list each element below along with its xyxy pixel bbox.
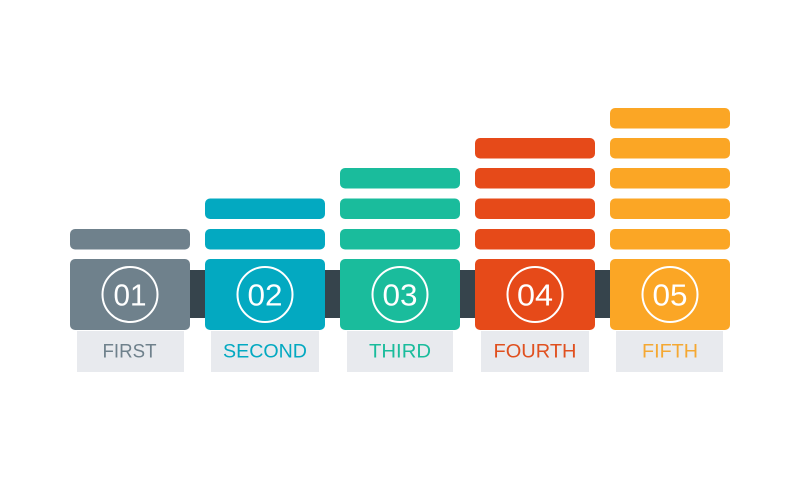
number box 05: 05 bbox=[652, 278, 688, 312]
label: third: THIRD bbox=[369, 340, 431, 362]
label: fourth: FOURTH bbox=[494, 340, 576, 362]
number box 01 bbox=[70, 259, 190, 330]
number box 05 bbox=[610, 259, 730, 330]
label: second bbox=[211, 331, 319, 372]
label: first bbox=[77, 331, 184, 372]
label: second: SECOND bbox=[223, 340, 307, 362]
column 2: second bbox=[205, 198, 325, 372]
number box 03: 03 bbox=[382, 278, 418, 312]
number box 02 bbox=[205, 259, 325, 330]
label: fifth: FIFTH bbox=[642, 340, 698, 362]
stack bars 2 bbox=[205, 198, 325, 250]
column 3: third bbox=[340, 168, 460, 372]
column 1: first bbox=[70, 229, 190, 372]
stack bars 4 bbox=[475, 138, 595, 250]
number box 04: 04 bbox=[517, 278, 553, 312]
column 4: fourth bbox=[475, 138, 595, 372]
label: fifth bbox=[616, 331, 723, 372]
connector band bbox=[185, 270, 615, 318]
stack bars 5 bbox=[610, 108, 730, 250]
number box 02: 02 bbox=[248, 278, 282, 312]
stack bars 1 bbox=[70, 229, 190, 250]
stack bars 3 bbox=[340, 168, 460, 250]
label: fourth bbox=[481, 331, 589, 372]
number box 01: 01 bbox=[114, 278, 146, 312]
number box 04 bbox=[475, 259, 595, 330]
label: third bbox=[347, 331, 453, 372]
column 5: fifth bbox=[610, 108, 730, 372]
number box 03 bbox=[340, 259, 460, 330]
label: first: FIRST bbox=[102, 340, 157, 362]
